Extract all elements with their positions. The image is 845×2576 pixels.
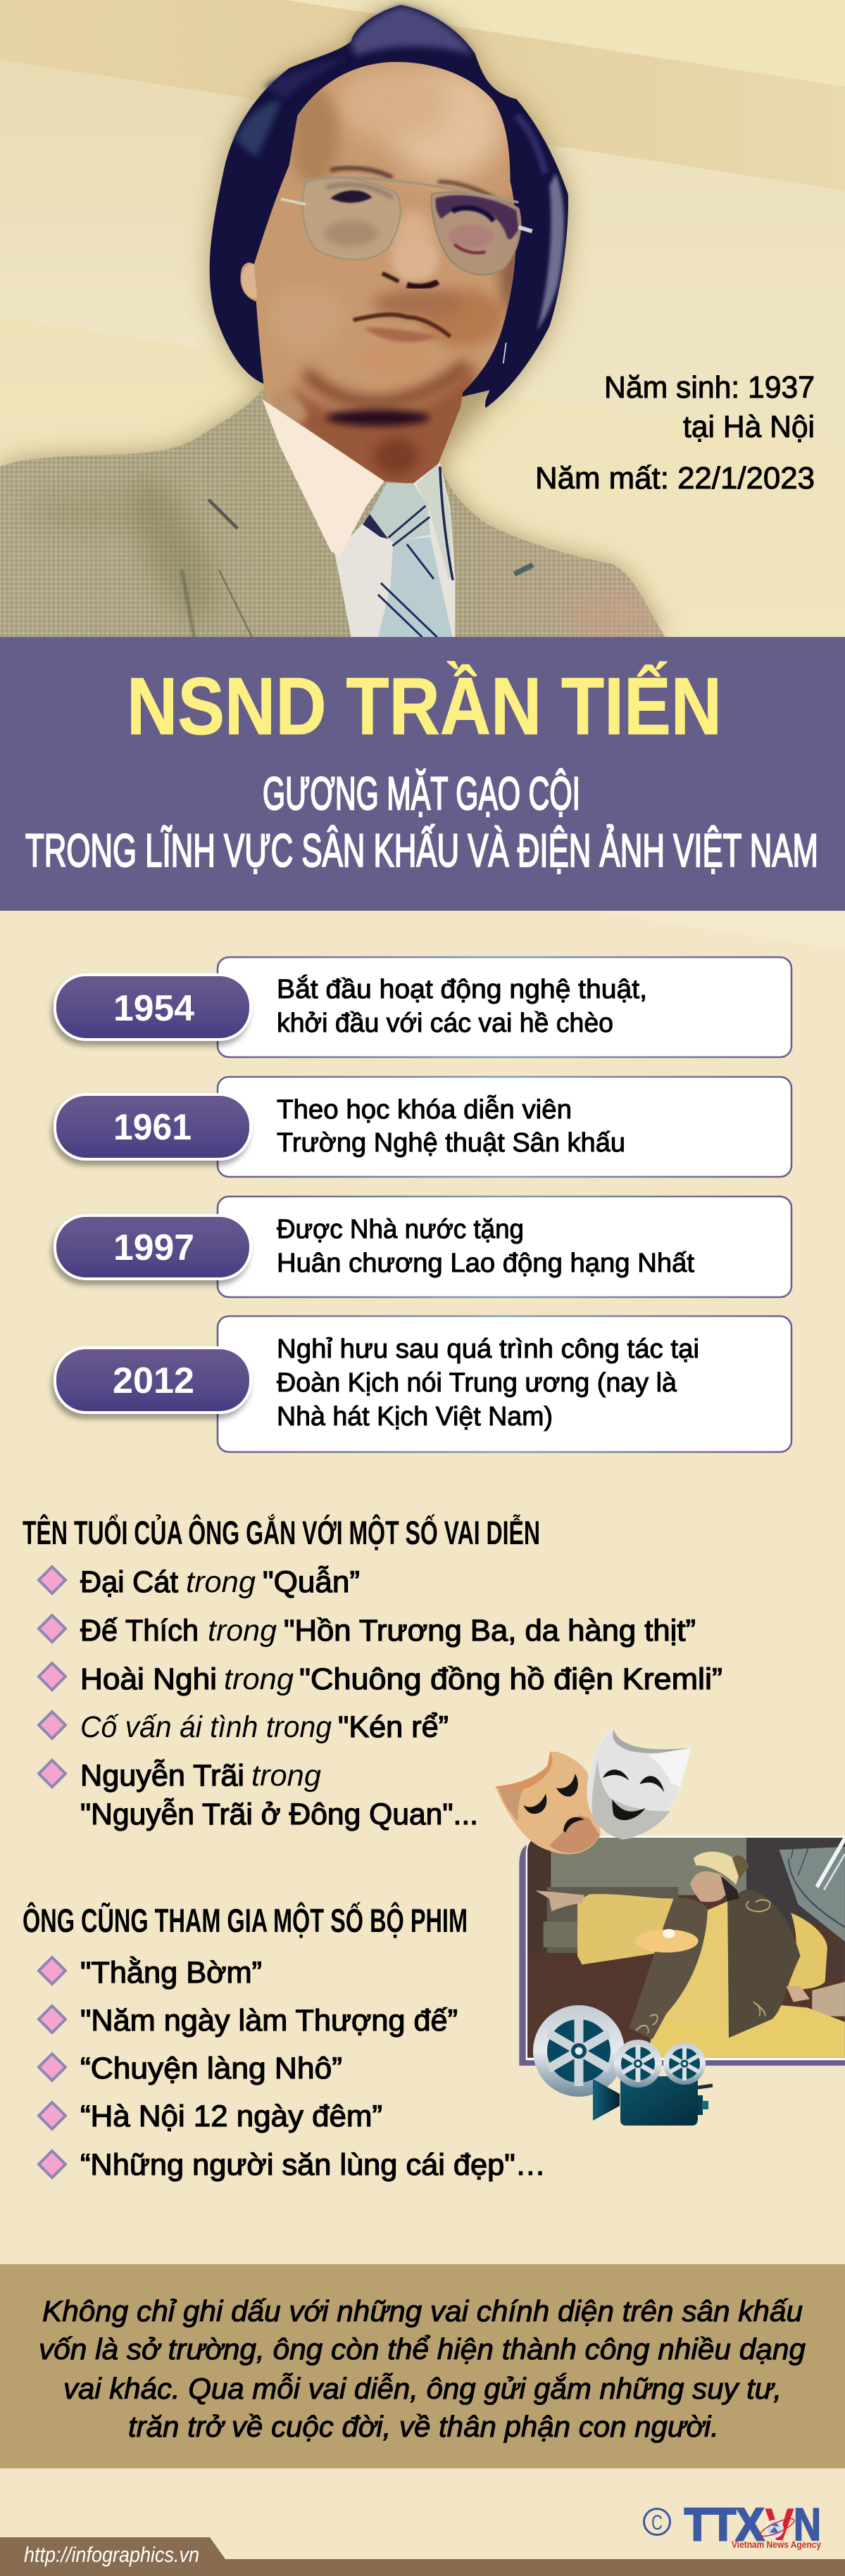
role 5: "Nguyễn Trãi ở Đông Quan"... <box>80 1798 478 1831</box>
agency logo: TTX <box>684 2499 764 2550</box>
icon: theatre masks <box>495 1729 691 1855</box>
timeline item 1961: Trường Nghệ thuật Sân khấu <box>277 1128 625 1158</box>
collar <box>263 399 384 556</box>
birth and death dates: Năm sinh: 1937 <box>604 370 815 405</box>
timeline item 2012: Nhà hát Kịch Việt Nam) <box>277 1402 553 1432</box>
timeline item 1954 <box>55 957 791 1057</box>
shirt <box>334 462 456 637</box>
subtitle <box>25 767 818 876</box>
role 3: Hoài Nghi <box>80 1662 217 1696</box>
glare <box>635 1930 699 1952</box>
birth and death dates <box>535 370 815 495</box>
role 1: trong <box>186 1565 256 1599</box>
film 5: “Những người săn lùng cái đẹp"… <box>80 2148 546 2182</box>
timeline item 1997 <box>55 1197 791 1297</box>
stage photo <box>527 1838 845 2058</box>
agency logo: N <box>794 2499 821 2550</box>
timeline item 2012 <box>55 1316 791 1452</box>
panel: films <box>23 1902 546 2182</box>
role 2: Đế Thích <box>80 1614 199 1648</box>
timeline item 2012: 2012 <box>113 1360 194 1401</box>
agency logo: Vietnam News Agency <box>732 2539 821 2550</box>
agency logo: C <box>651 2511 663 2534</box>
robe <box>648 1999 845 2058</box>
role 5 <box>39 1759 478 1831</box>
panel: closing quote: vai khác. Qua mỗi vai diễn, ông gửi gắm những suy tư, <box>63 2372 782 2405</box>
ear <box>242 264 257 298</box>
timeline item 2012: Nghỉ hưu sau quá trình công tác tại <box>277 1334 699 1364</box>
panel: closing quote <box>0 2264 845 2468</box>
timeline item 2012: Đoàn Kịch nói Trung ương (nay là <box>277 1368 677 1398</box>
icon: film projector <box>533 2005 713 2126</box>
birth and death dates: tại Hà Nội <box>683 410 815 444</box>
jacket <box>0 384 669 640</box>
role 5: trong <box>251 1759 321 1793</box>
footer bar: http://infographics.vn <box>24 2542 199 2567</box>
portrait photo <box>0 5 669 640</box>
nose and mouth <box>392 239 438 281</box>
film 4: “Hà Nội 12 ngày đêm” <box>80 2100 382 2133</box>
timeline item 1954: khởi đầu với các vai hề chèo <box>277 1009 613 1038</box>
role 2 <box>39 1614 696 1648</box>
timeline item 1961: 1961 <box>113 1107 192 1148</box>
role 4 <box>39 1710 449 1744</box>
heading: films: ÔNG CŨNG THAM GIA MỘT SỐ BỘ PHIM <box>23 1902 468 1939</box>
role 4: Cố vấn ái tình trong <box>80 1710 332 1744</box>
eyebrows <box>330 168 392 177</box>
timeline item 1961: Theo học khóa diễn viên <box>277 1094 572 1125</box>
timeline item 1997: Huân chương Lao động hạng Nhất <box>277 1249 694 1278</box>
face and neck <box>240 62 532 495</box>
photo frame <box>519 1838 845 2066</box>
role 2: trong <box>208 1614 277 1648</box>
subtitle: GƯƠNG MẶT GẠO CỘI <box>263 767 580 819</box>
hands, face and headband <box>535 1890 584 1912</box>
film 3: “Chuyện làng Nhô” <box>80 2052 342 2085</box>
title: NSND TRẦN TIẾN <box>127 662 722 752</box>
film 1: "Thằng Bờm” <box>80 1956 262 1990</box>
agency logo: V <box>765 2499 794 2550</box>
panel: hero portrait area <box>0 0 845 640</box>
role 1: "Quẫn” <box>263 1565 360 1599</box>
glasses <box>281 177 532 274</box>
role 2: "Hồn Trương Ba, da hàng thịt” <box>284 1614 696 1648</box>
stage photo with masks and projector <box>495 1729 845 2126</box>
title banner <box>0 637 845 911</box>
timeline item 1997: Được Nhà nước tặng <box>277 1215 524 1244</box>
timeline item 1997: 1997 <box>113 1227 194 1268</box>
timeline item 1961 <box>55 1077 791 1177</box>
film 2: "Năm ngày làm Thượng đế” <box>80 2004 458 2038</box>
role 1: Đại Cát <box>80 1565 178 1599</box>
panel: closing quote: vốn là sở trường, ông còn thể hiện thành công nhiều dạng <box>39 2332 806 2366</box>
role 5: Nguyễn Trãi <box>80 1759 244 1793</box>
role 4: "Kén rể” <box>338 1710 449 1744</box>
agency logo <box>644 2499 821 2550</box>
timeline item 1954: Bắt đầu hoạt động nghệ thuật, <box>277 974 647 1004</box>
panel: timeline <box>55 957 791 1452</box>
role 3: "Chuông đồng hồ điện Kremli” <box>299 1662 722 1696</box>
lower background accent <box>587 911 845 950</box>
tie <box>363 483 452 637</box>
timeline item 1954: 1954 <box>113 988 194 1029</box>
panel: closing quote: Không chỉ ghi dấu với những vai chính diện trên sân khấu <box>42 2294 803 2328</box>
role 3 <box>39 1662 722 1696</box>
heading: roles: TÊN TUỔI CỦA ÔNG GẮN VỚI MỘT SỐ VAI DIỄN <box>23 1514 540 1551</box>
birth and death dates: Năm mất: 22/1/2023 <box>535 461 815 495</box>
footer bar <box>0 2537 845 2576</box>
role 1 <box>39 1565 360 1599</box>
hair <box>210 5 568 408</box>
role 3: trong <box>224 1662 294 1696</box>
panel: theatre roles <box>23 1514 722 1831</box>
panel: closing quote: trăn trở về cuộc đời, về thân phận con người. <box>128 2410 719 2443</box>
